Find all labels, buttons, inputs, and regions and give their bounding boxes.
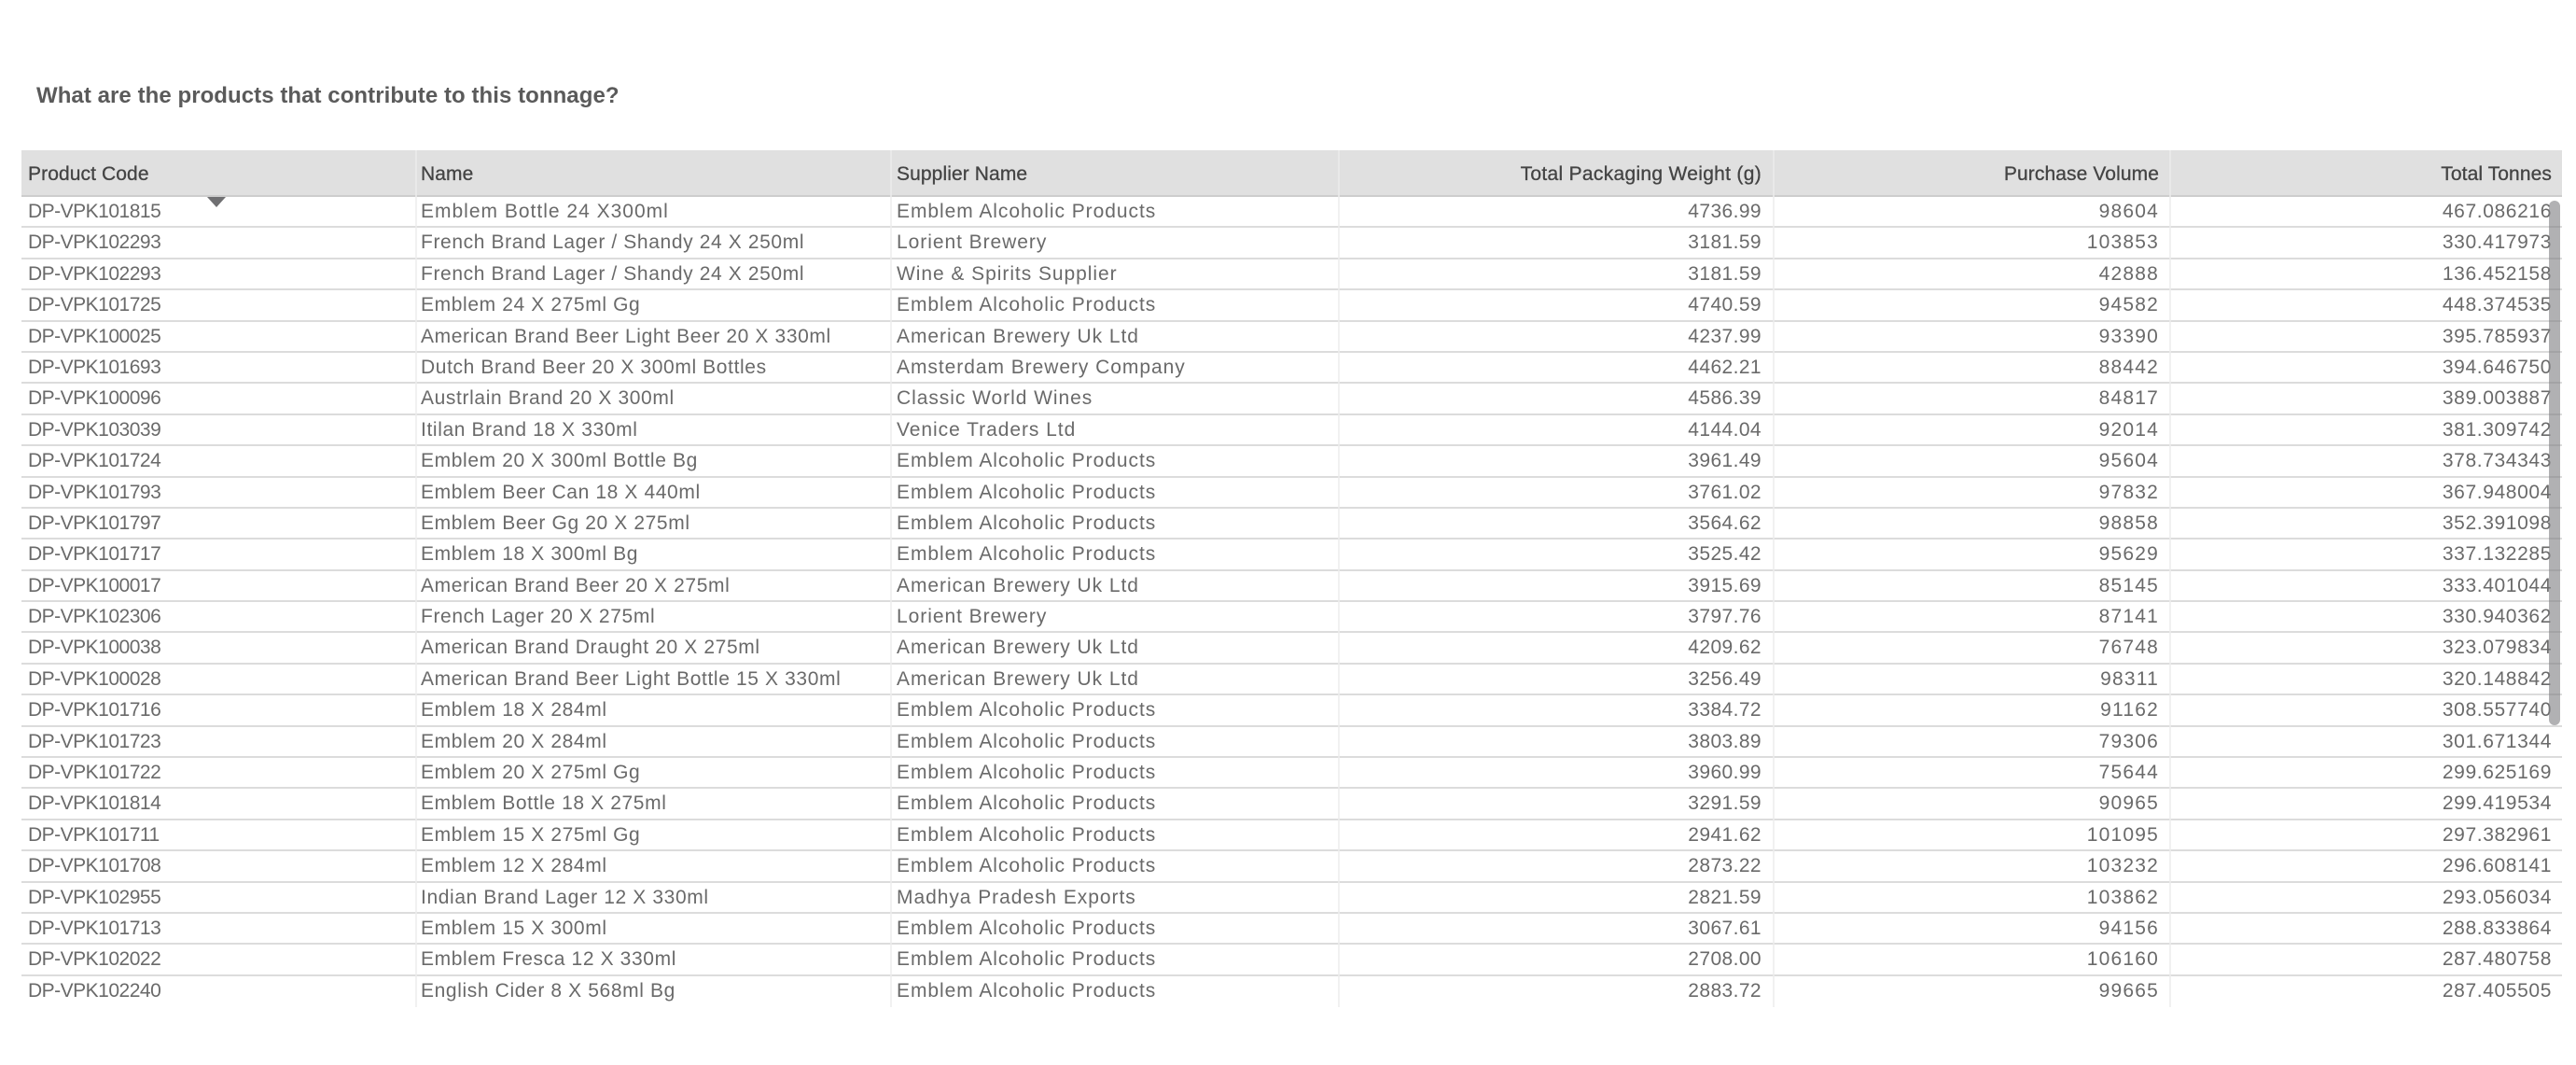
row 13: DP-VPK100017 [28,575,160,596]
row 15: American Brewery Uk Ltd [897,637,1139,658]
row 20 [21,789,2562,820]
row 8: 4144.04 [1688,419,1761,441]
row 25: Emblem Alcoholic Products [897,948,1156,970]
row 1: Emblem Bottle 24 X300ml [421,201,669,222]
row 25: 106160 [2087,948,2159,970]
row 17 [21,695,2562,727]
row 15: 4209.62 [1688,637,1761,658]
row 20: 3291.59 [1688,792,1761,814]
row 7: Austrlain Brand 20 X 300ml [421,387,675,409]
row 11: Emblem Alcoholic Products [897,512,1156,534]
row 14: DP-VPK102306 [28,606,160,627]
row 22: DP-VPK101708 [28,855,160,876]
row 11: DP-VPK101797 [28,512,160,534]
row 15: 323.079834 [2443,637,2552,658]
row 7 [21,384,2562,415]
row 23 [21,883,2562,914]
row 5: 4237.99 [1688,326,1761,347]
row 13: 85145 [2099,575,2159,596]
row 26: English Cider 8 X 568ml Bg [421,980,675,1002]
row 24: 3067.61 [1688,918,1761,939]
row 2 [21,228,2562,259]
row 17: Emblem Alcoholic Products [897,699,1156,721]
row 9: 378.734343 [2443,450,2552,471]
row 19: Emblem Alcoholic Products [897,762,1156,783]
row 18: 301.671344 [2443,731,2552,752]
row 10 [21,478,2562,509]
row 17: 308.557740 [2443,699,2552,721]
row 8: DP-VPK103039 [28,419,160,441]
row 21: 297.382961 [2443,824,2552,846]
row 21: DP-VPK101711 [28,824,160,846]
row 9 [21,446,2562,478]
row 6: Amsterdam Brewery Company [897,357,1186,378]
row 3: Wine & Spirits Supplier [897,263,1118,285]
row 17: 91162 [2100,699,2159,721]
row 2: 330.417973 [2443,231,2552,253]
row 25 [21,945,2562,976]
row 23: Madhya Pradesh Exports [897,887,1136,908]
row 1: Emblem Alcoholic Products [897,201,1156,222]
table header row: Product Code [28,163,149,185]
row 10: 97832 [2099,482,2159,503]
row 8: Itilan Brand 18 X 330ml [421,419,638,441]
row 3: 136.452158 [2443,263,2552,285]
row 20: DP-VPK101814 [28,792,160,814]
row 16: 320.148842 [2443,668,2552,690]
row 18: Emblem Alcoholic Products [897,731,1156,752]
row 25: 2708.00 [1688,948,1761,970]
row 24: 94156 [2099,918,2159,939]
row 24 [21,914,2562,945]
row 19: Emblem 20 X 275ml Gg [421,762,640,783]
row 2: Lorient Brewery [897,231,1047,253]
row 6: 394.646750 [2443,357,2552,378]
row 23: Indian Brand Lager 12 X 330ml [421,887,709,908]
row 4: 448.374535 [2443,294,2552,315]
row 17: Emblem 18 X 284ml [421,699,607,721]
row 3: 3181.59 [1688,263,1761,285]
row 24: 288.833864 [2443,918,2552,939]
row 23: DP-VPK102955 [28,887,160,908]
row 16: 98311 [2100,668,2159,690]
row 4: 4740.59 [1688,294,1761,315]
row 15: 76748 [2099,637,2159,658]
row 13: 3915.69 [1688,575,1761,596]
row 8: 92014 [2099,419,2159,441]
row 5: American Brand Beer Light Beer 20 X 330ml [421,326,831,347]
row 19: 299.625169 [2443,762,2552,783]
table header row: Name [421,163,473,185]
row 2: 3181.59 [1688,231,1761,253]
row 17: DP-VPK101716 [28,699,160,721]
row 15: DP-VPK100038 [28,637,160,658]
row 10: 3761.02 [1688,482,1761,503]
row 18: DP-VPK101723 [28,731,160,752]
row 20: Emblem Alcoholic Products [897,792,1156,814]
row 23: 103862 [2087,887,2159,908]
row 2: French Brand Lager / Shandy 24 X 250ml [421,231,804,253]
row 24: Emblem 15 X 300ml [421,918,607,939]
row 10: 367.948004 [2443,482,2552,503]
row 22: Emblem Alcoholic Products [897,855,1156,876]
row 6: Dutch Brand Beer 20 X 300ml Bottles [421,357,767,378]
row 4: Emblem 24 X 275ml Gg [421,294,640,315]
row 9: 95604 [2099,450,2159,471]
row 1: 4736.99 [1688,201,1761,222]
row 22: Emblem 12 X 284ml [421,855,607,876]
row 17: 3384.72 [1688,699,1761,721]
row 13 [21,571,2562,602]
row 26: 99665 [2099,980,2159,1002]
row 18: Emblem 20 X 284ml [421,731,607,752]
row 5: 395.785937 [2443,326,2552,347]
row 9: Emblem Alcoholic Products [897,450,1156,471]
row 4 [21,290,2562,322]
row 7: 84817 [2099,387,2159,409]
row 9: Emblem 20 X 300ml Bottle Bg [421,450,698,471]
row 7: 389.003887 [2443,387,2552,409]
table header row: Total Packaging Weight (g) [1521,163,1761,185]
row 20: 90965 [2099,792,2159,814]
row 5: DP-VPK100025 [28,326,160,347]
row 15 [21,633,2562,665]
row 3 [21,259,2562,290]
row 16 [21,665,2562,695]
row 19 [21,758,2562,789]
row 15: American Brand Draught 20 X 275ml [421,637,760,658]
row 8: 381.309742 [2443,419,2552,441]
row 2: 103853 [2087,231,2159,253]
row 2: DP-VPK102293 [28,231,160,253]
row 8: Venice Traders Ltd [897,419,1076,441]
row 26: 287.405505 [2443,980,2552,1002]
row 1: 467.086216 [2443,201,2552,222]
row 13: American Brewery Uk Ltd [897,575,1139,596]
row 25: DP-VPK102022 [28,948,160,970]
row 25: 287.480758 [2443,948,2552,970]
row 3: 42888 [2099,263,2159,285]
row 16: American Brewery Uk Ltd [897,668,1139,690]
row 14: 330.940362 [2443,606,2552,627]
row 12: Emblem Alcoholic Products [897,543,1156,565]
row 14 [21,602,2562,633]
row 11: 3564.62 [1688,512,1761,534]
row 10: DP-VPK101793 [28,482,160,503]
scrollbar [2549,201,2560,725]
row 12 [21,540,2562,571]
row 20: Emblem Bottle 18 X 275ml [421,792,666,814]
row 7: Classic World Wines [897,387,1093,409]
row 26: Emblem Alcoholic Products [897,980,1156,1002]
row 23: 293.056034 [2443,887,2552,908]
row 5: 93390 [2099,326,2159,347]
row 12: 337.132285 [2443,543,2552,565]
row 23: 2821.59 [1688,887,1761,908]
row 1: 98604 [2099,201,2159,222]
row 8 [21,415,2562,446]
row 16: DP-VPK100028 [28,668,160,690]
row 22: 103232 [2087,855,2159,876]
row 5: American Brewery Uk Ltd [897,326,1139,347]
row 18: 3803.89 [1688,731,1761,752]
row 26: DP-VPK102240 [28,980,160,1002]
row 13: American Brand Beer 20 X 275ml [421,575,730,596]
row 22: 296.608141 [2443,855,2552,876]
row 3: DP-VPK102293 [28,263,160,285]
row 26: 2883.72 [1688,980,1761,1002]
row 3: French Brand Lager / Shandy 24 X 250ml [421,263,804,285]
row 9: DP-VPK101724 [28,450,160,471]
row 11 [21,509,2562,540]
row 10: Emblem Alcoholic Products [897,482,1156,503]
row 25: Emblem Fresca 12 X 330ml [421,948,676,970]
row 21: 101095 [2087,824,2159,846]
row 6: 4462.21 [1688,357,1761,378]
row 14: 3797.76 [1688,606,1761,627]
row 9: 3961.49 [1688,450,1761,471]
table header row [21,150,2562,197]
row 21: 2941.62 [1688,824,1761,846]
row 6 [21,353,2562,384]
table header row: Total Tonnes [2441,163,2552,185]
row 10: Emblem Beer Can 18 X 440ml [421,482,701,503]
row 21: Emblem 15 X 275ml Gg [421,824,640,846]
row 7: DP-VPK100096 [28,387,160,409]
row 18: 79306 [2099,731,2159,752]
row 22 [21,851,2562,883]
row 26 [28,980,2552,1002]
row 20: 299.419534 [2443,792,2552,814]
row 4: 94582 [2099,294,2159,315]
row 11: 352.391098 [2443,512,2552,534]
row 7: 4586.39 [1688,387,1761,409]
row 16: 3256.49 [1688,668,1761,690]
row 1: DP-VPK101815 [28,201,160,222]
row 24: Emblem Alcoholic Products [897,918,1156,939]
sort arrow icon [207,197,226,207]
row 21: Emblem Alcoholic Products [897,824,1156,846]
table header row: Supplier Name [897,163,1027,185]
row 18 [21,727,2562,758]
row 14: Lorient Brewery [897,606,1047,627]
row 12: Emblem 18 X 300ml Bg [421,543,638,565]
row 16: American Brand Beer Light Bottle 15 X 330ml [421,668,841,690]
row 12: DP-VPK101717 [28,543,160,565]
row 5 [21,322,2562,353]
row 22: 2873.22 [1688,855,1761,876]
title: What are the products that contribute to this tonnage? [36,83,620,108]
row 13: 333.401044 [2443,575,2552,596]
row 11: Emblem Beer Gg 20 X 275ml [421,512,690,534]
row 11: 98858 [2099,512,2159,534]
table header row: Purchase Volume [2004,163,2159,185]
row 12: 95629 [2099,543,2159,565]
row 1 [21,197,2562,228]
row 19: 3960.99 [1688,762,1761,783]
row 12: 3525.42 [1688,543,1761,565]
row 6: 88442 [2099,357,2159,378]
row 19: 75644 [2099,762,2159,783]
row 4: DP-VPK101725 [28,294,160,315]
row 4: Emblem Alcoholic Products [897,294,1156,315]
row 6: DP-VPK101693 [28,357,160,378]
row 24: DP-VPK101713 [28,918,160,939]
row 21 [21,820,2562,851]
row 14: French Lager 20 X 275ml [421,606,655,627]
data table [21,150,2562,1002]
row 14: 87141 [2099,606,2159,627]
row 19: DP-VPK101722 [28,762,160,783]
